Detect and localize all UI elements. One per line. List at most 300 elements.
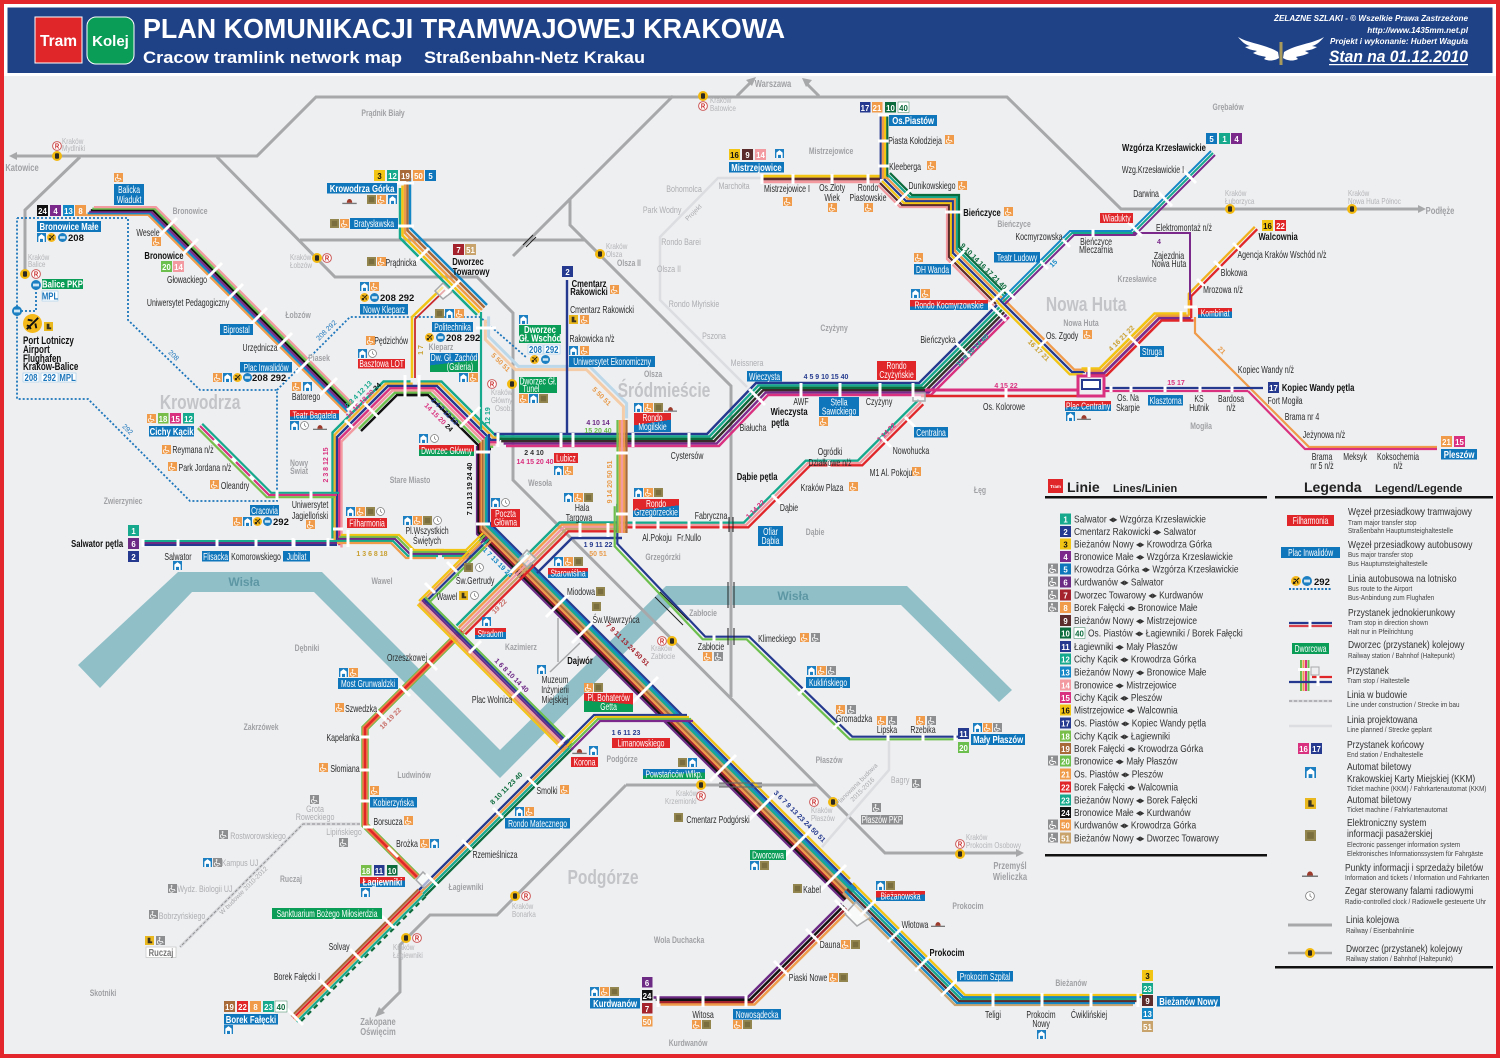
stop names: east: Wieczysta: [771, 406, 808, 417]
list of tram lines: 13: [1061, 668, 1070, 678]
transfer tags: blue: Bratysławska: [354, 218, 394, 229]
stop names: south-east: Klimeckiego: [758, 633, 796, 644]
tram bundle: Limanowskiego: [565, 715, 693, 750]
district names: Skotniki: [90, 988, 116, 998]
line badges: termini: 6: [131, 540, 136, 549]
district names: Stare Miasto: [390, 475, 430, 485]
legend: tram stop: Przystanek: [1347, 665, 1389, 676]
legend: passenger information system: Electronic passenger information system: [1347, 842, 1461, 849]
transfer tags: grey and bus boxes: 208: [25, 372, 37, 383]
line number captions along tracks: 15 20 40: [584, 428, 612, 435]
district names: Łagiewniki: [449, 882, 483, 892]
legend: airport bus: [1289, 573, 1457, 602]
list of tram lines: 3: [1063, 540, 1068, 550]
line badges: termini: 12: [184, 415, 193, 424]
list of tram lines: Bronowice Małe ◂▸ Wzgórza Krzesławickie: [1074, 551, 1233, 562]
legend: line planned: Linia projektowana: [1347, 714, 1418, 725]
stop names: centre: Miejskiej: [542, 694, 568, 705]
list of tram lines: Mistrzejowice ◂▸ Walcownia: [1074, 705, 1178, 716]
stop names: centre: Cmentarz Podgórski: [686, 814, 750, 825]
line number captions along tracks: 1 7 13 19 24: [481, 547, 513, 579]
stop names: east: Piasta Kołodzieja: [888, 135, 942, 146]
legend: radio clock: Radio-controlled clock / Radiowelle gesteuerte Uhr: [1345, 899, 1487, 906]
railway station and direction labels: Zakopane: [360, 1016, 396, 1027]
icon: Kolej button: Kolej: [92, 33, 129, 50]
transfer tags: grey and bus boxes: Płaszów PKP: [862, 814, 903, 825]
credits: http://www.1435mm.net.pl: [1367, 26, 1469, 35]
transfer tags: grey and bus boxes: 292: [546, 344, 558, 355]
line under construction to Ruczaj: [180, 824, 360, 947]
stop names: east: AWF: [793, 396, 809, 407]
stop names: south-east: Kabel: [803, 884, 821, 895]
district names: Piasek: [308, 353, 330, 363]
legend: line under construction: [1289, 689, 1460, 709]
district names: Łęg: [974, 485, 986, 495]
district names: Grębałów: [1213, 102, 1244, 112]
legend: railway station stop: [1292, 639, 1465, 660]
tram bundle: Dąbie: [620, 400, 923, 527]
transfer tags: red and mixed: Teatr Bagatela: [293, 409, 337, 421]
transfer tags: blue: Pleszów: [1444, 449, 1475, 460]
railway station and direction labels: Kraków: [393, 942, 415, 952]
list of tram lines: Bieżanów Nowy ◂▸ Krowodrza Górka: [1074, 539, 1213, 550]
line badges: termini: 9: [1145, 997, 1150, 1006]
legend: KKM ticket machine: [1305, 761, 1486, 793]
list of tram lines: Bieżanów Nowy ◂▸ Mistrzejowice: [1074, 615, 1197, 626]
district names: Zwierzyniec: [104, 496, 143, 506]
stop names: west: Pl.Wszystkich: [405, 525, 449, 536]
railway station and direction labels: Balice: [28, 259, 45, 269]
line badges: termini: 50: [643, 1018, 652, 1027]
stop names: east: Elektromontaż n/ż: [1156, 222, 1212, 233]
district names: Czyżyny: [820, 323, 848, 333]
legend: bus major transfer stop: Węzeł przesiadkowy autobusowy: [1348, 539, 1473, 550]
legend: line under construction: Line under construction / Strecke im bau: [1347, 702, 1460, 709]
stop names: centre: Miodowa: [567, 586, 595, 597]
railway station and direction labels: Kraków: [512, 901, 534, 911]
line badges: termini: 3: [377, 172, 382, 181]
list of tram lines: 15: [1061, 694, 1070, 703]
stop names: south-east: Lipska: [877, 724, 897, 735]
airport block: Port Lotniczy: [23, 335, 74, 347]
stop names: east: Bardosa: [1218, 393, 1244, 404]
stop names: south-east: Teligi: [985, 1009, 1001, 1020]
transfer tags: railway station green: Dworzec: [524, 324, 556, 335]
legend: radio clock: [1306, 885, 1487, 906]
stop names: south-east: Gromadzka: [836, 713, 872, 724]
legend: railway station: [1288, 943, 1463, 963]
stop names: centre: Cmentarz: [572, 278, 607, 289]
stop names: east: Kopiec Wandy pętla: [1282, 382, 1355, 393]
stop names: centre: Fr.Nullo: [677, 532, 701, 543]
list of tram lines: 51: [1061, 834, 1070, 844]
stop names: east: pętla: [771, 417, 790, 428]
legend: railway station stop: Dworzec (przystanek) kolejowy: [1348, 639, 1465, 650]
list of tram lines: Cichy Kącik ◂▸ Pleszów: [1074, 692, 1162, 703]
railway station and direction labels: Kraków: [811, 805, 833, 815]
tram bundle: ring north-east: [406, 382, 504, 449]
district names: Nowa Huta: [1063, 318, 1099, 328]
district names: Bieńczyce: [997, 219, 1031, 229]
planned and construction stop names: 2015-2016: [849, 776, 877, 803]
tram bundle: Krowodrza Górka: [400, 178, 487, 315]
stop names: east: Meksyk: [1343, 451, 1368, 462]
line number captions along tracks: 21: [1216, 346, 1226, 356]
stop names: east: Dąbie: [780, 502, 798, 513]
stop names: south-east: Witosa: [692, 1009, 714, 1020]
stop names: east: Walcownia: [1258, 231, 1299, 242]
planned and construction stop names: Pszona: [702, 330, 726, 341]
stop names: east: nr 5 n/ż: [1310, 460, 1334, 471]
railway station and direction labels: Osob.: [495, 403, 512, 413]
district names: Świat: [290, 466, 308, 476]
list of tram lines: 18: [1061, 732, 1070, 742]
panel: legend: [1275, 479, 1493, 968]
legend: line planned: Line planned / Strecke geplant: [1347, 727, 1432, 734]
line number captions along tracks: 8 10 11 23 40: [489, 771, 524, 806]
district names: Kleparz: [429, 342, 453, 352]
line badges: termini: 17: [1269, 384, 1278, 393]
line badges: termini: 19: [225, 1003, 234, 1012]
legend: end station: 16: [1299, 745, 1308, 754]
planned and construction stop names: Bobrzyńskiego: [159, 910, 206, 921]
stop names: east: n/ż: [1226, 402, 1236, 413]
transfer tags: blue: Kuklińskiego: [809, 677, 847, 688]
list of tram lines: Bieżanów Nowy ◂▸ Bronowice Małe: [1074, 667, 1206, 678]
district names: Podgórze: [607, 754, 638, 764]
stop names: centre: Dworzec: [452, 256, 484, 267]
planned and construction stop names: Lipińskiego: [326, 826, 362, 837]
line badges: termini: 3: [1145, 972, 1150, 981]
line badges: termini: 14: [174, 263, 183, 272]
tram bundle: Grzegórzki to Stradom: [456, 522, 625, 634]
district names: Mistrzejowice: [809, 146, 854, 156]
list of tram lines: Cichy Kącik ◂▸ Łagiewniki: [1074, 731, 1170, 742]
airport bus route dotted: [17, 218, 527, 501]
legend: airport bus: Bus-Anbindung zum Flughafen: [1348, 595, 1435, 602]
tram bundle: Bronowice: [86, 207, 354, 413]
line badges: termini: 5: [1209, 135, 1214, 144]
stop names: west: Świętych: [413, 534, 441, 546]
legend: information and ticket points: Information and tickets / Information und Fahrkarten: [1345, 875, 1490, 882]
stop names: west: Jagielloński: [292, 510, 328, 521]
tram bundle: Wzgórza Krzesławickie: [1001, 151, 1215, 304]
stop names: centre: Al.Pokoju: [642, 532, 672, 543]
stop names: west: Orzeszkowej: [387, 652, 427, 663]
district names: Mogiła: [1190, 421, 1212, 431]
stop names: east: [737, 135, 1419, 513]
line badges: termini: 18: [159, 415, 168, 424]
district names: Zakrzówek: [244, 722, 279, 732]
legend: radio clock: Zegar sterowany falami radiowymi: [1345, 885, 1473, 896]
line badges: termini: 6: [645, 979, 650, 988]
airport block: Kraków-Balice: [23, 361, 79, 373]
legend: end station: [1298, 739, 1424, 759]
line number captions along tracks: 5 50 51: [489, 352, 511, 374]
stop names: east: Czyżyny: [866, 396, 893, 407]
stop names: east: Kleeberga: [889, 161, 921, 172]
list of tram lines: Kurdwanów ◂▸ Krowodrza Górka: [1074, 820, 1197, 831]
line number captions along tracks: 208: [166, 349, 180, 363]
stop names: centre: Rakowicki: [570, 286, 608, 297]
legend: one way stop: Tram stop in direction shown: [1348, 620, 1428, 627]
stop names: south-east: Nowy: [1032, 1018, 1050, 1029]
legend: information and ticket points: [1302, 862, 1490, 882]
transfer tags: blue: Nowosądecka: [736, 1009, 779, 1020]
transfer tags: railway station green: Tunel: [523, 383, 539, 394]
district names: Wola Duchacka: [654, 935, 705, 945]
Plac Centralny loop: [1078, 376, 1104, 396]
stop names: west: Salwator: [164, 551, 192, 562]
legend: tram stop: Tram stop / Haltestelle: [1347, 678, 1410, 685]
line badges: termini: 21: [873, 104, 882, 113]
stop names: west: Batorego: [292, 391, 320, 402]
stop names: east: Dunikowskiego: [909, 180, 956, 191]
legend: ticket machine: [1305, 794, 1447, 814]
line badges: termini: 21: [1442, 438, 1451, 447]
tram bundle: Salwator: [143, 541, 337, 545]
stop names: east: Mistrzejowice I: [764, 183, 810, 194]
list of tram lines: 2: [1063, 528, 1068, 537]
tram bundle: Bieżanów branch: [843, 883, 1143, 1005]
airport block: Flughafen: [23, 353, 61, 365]
railway station and direction labels: Warszawa: [755, 78, 791, 89]
stop names: centre: [452, 256, 750, 860]
transfer tags: red and mixed: Korona: [574, 756, 596, 768]
district names: Zabłocie: [689, 608, 717, 618]
line badges: termini: 11: [375, 867, 384, 876]
line badges: termini: 13: [1143, 1010, 1152, 1019]
list of tram lines: Bronowice ◂▸ Mistrzejowice: [1074, 680, 1177, 691]
transfer tags: blue: Wieczysta: [749, 371, 780, 382]
line badges: termini: 10: [886, 104, 895, 113]
heading: Linie: Lines/Linien: [1113, 483, 1177, 495]
transfer tags: blue: Bieżanów Nowy: [1159, 996, 1219, 1007]
list of tram lines: 24: [1061, 809, 1070, 818]
transfer tags: blue: Rondo Matecznego: [508, 818, 567, 829]
list of tram lines: 7: [1063, 591, 1068, 601]
district names: Płaszów: [816, 755, 843, 765]
stop names: east: Koksochemia: [1377, 451, 1419, 462]
line badges: termini: 1: [131, 527, 136, 536]
bus line numbers at stops: 208 292: [446, 333, 480, 344]
railway station and direction labels: Krzemionki: [665, 796, 697, 806]
stop names: east: Bieńczyce: [1080, 236, 1112, 247]
stop names: east: Zajezdnia: [1154, 250, 1184, 261]
panel: lines list: [1045, 479, 1267, 856]
list of tram lines: Łagiewniki ◂▸ Mały Płaszów: [1074, 641, 1178, 652]
railway station and direction labels: Kraków: [491, 387, 513, 397]
stop names: west: Szwedzka: [345, 703, 377, 714]
legend: KKM ticket machine: Automat biletowy: [1347, 761, 1412, 772]
stop names: south-east: Rzebika: [910, 724, 936, 735]
stop names: east: Os. Kolorowe: [983, 401, 1025, 412]
list of tram lines: Dworzec Towarowy ◂▸ Kurdwanów: [1074, 590, 1203, 601]
line badges: termini: 23: [264, 1003, 273, 1012]
line badges: termini: 4: [1234, 135, 1239, 144]
line badges: termini: 13: [64, 207, 73, 216]
list of tram lines: Kurdwanów ◂▸ Salwator: [1074, 577, 1164, 588]
list of tram lines: Cichy Kącik ◂▸ Krowodrza Górka: [1074, 654, 1197, 665]
district names: Wesoła: [528, 478, 552, 488]
planned and construction stop names: Park Wodny: [643, 204, 682, 215]
line number captions along tracks: [120, 239, 1226, 844]
stop names: west: Urzędnicza: [243, 342, 278, 353]
transfer tags: red and mixed: Bieżanowska: [881, 890, 921, 902]
line badges: termini: 7: [456, 246, 461, 255]
list of tram lines: 21: [1061, 770, 1070, 780]
railway station and direction labels: Zabłocie: [651, 651, 675, 661]
heading: Linie: Tram: [1050, 484, 1061, 489]
stop names: east: Kopiec Wandy n/ż: [1238, 364, 1294, 375]
line number captions along tracks: 2 3 8 12 15: [323, 447, 330, 483]
list of tram lines: Cmentarz Rakowicki ◂▸ Salwator: [1074, 526, 1196, 537]
big area name: Śródmieście: Śródmieście: [618, 378, 710, 401]
tram bundle: Bieńczyce: [878, 173, 1006, 306]
viaduct and bridge marks: [523, 235, 762, 787]
line number captions along tracks: 19 22: [491, 598, 509, 616]
stop names: west: Słomiana: [330, 763, 360, 774]
legend: passenger information system: Elektronisches Informationssystem für Fahrgäste: [1347, 851, 1483, 858]
transfer tags: red and mixed: Lubicz: [556, 452, 576, 464]
stop names: centre: Fabryczna: [695, 510, 728, 521]
line number captions along tracks: 9 14 20 50 51: [607, 460, 614, 503]
line number captions along tracks: 18 19 22: [379, 707, 403, 731]
transfer tags: railway station green: Powstańców Wlkp.: [645, 768, 703, 780]
stop names: east: KS: [1194, 393, 1204, 404]
legend: tram major transfer stop: Węzeł przesiadkowy tramwajowy: [1348, 506, 1472, 517]
stop names: south-east: Dauna: [820, 939, 841, 950]
line number captions along tracks: 5 50 51: [590, 386, 612, 408]
stop names: south-east: Piaski Nowe: [789, 972, 827, 983]
district names: Dębniki: [295, 643, 319, 653]
line number captions along tracks: 1 9 11 22: [584, 542, 613, 549]
legend: end station: Przystanek końcowy: [1347, 739, 1424, 750]
planned and construction stop names: Grota: [306, 803, 324, 814]
transfer tags: grey and bus boxes: [23, 290, 903, 958]
transfer tags: red and mixed: Limanowskiego: [618, 737, 665, 749]
transfer tags: blue: Prokocim Szpital: [960, 971, 1010, 982]
credits: ŻELAZNE SZLAKI - © Wszelkie Prawa Zastrzeżone: [1273, 13, 1468, 23]
stop names: east: Piastowskie: [850, 192, 887, 203]
stop names: east: Skarpie: [1116, 402, 1140, 413]
railway station and direction labels: Łagiewniki: [393, 950, 423, 960]
stop names: centre: Św.Wawrzyńca: [592, 613, 640, 625]
stop names: centre: Rzemieślnicza: [472, 849, 518, 860]
stop names: south-east: Ćwiklińskiej: [1071, 1009, 1107, 1020]
stop names: east: Agencja Kraków Wschód n/ż: [1237, 249, 1327, 260]
stop names: west: Św.Gertrudy: [456, 574, 495, 586]
line badges: termini: 12: [388, 172, 397, 181]
legend: railway line: [1288, 914, 1414, 935]
line number captions along tracks: 1 14 22: [745, 499, 767, 521]
railway station and direction labels: Kraków: [28, 252, 50, 262]
line badges: termini: 15: [1455, 438, 1464, 447]
transfer tags: railway station green: Gł. Wschód: [519, 332, 562, 344]
transfer tags: railway station green: Balice PKP: [42, 278, 83, 290]
line badges: termini: 17: [861, 104, 870, 113]
list of tram lines: 12: [1061, 655, 1070, 665]
stop names: south-east: Włotowa: [902, 919, 929, 930]
legend: ticket machine: Ticket machine / Fahrkartenautomat: [1347, 807, 1447, 814]
stop names: west: Solvay: [329, 941, 350, 952]
stop names: east: Bieńczycka: [920, 334, 956, 345]
list of tram lines: 5: [1063, 565, 1068, 575]
transfer tags: grey and bus boxes: Ruczaj: [149, 947, 173, 958]
heading: Legenda: Legend/Legende: [1375, 483, 1462, 495]
transfer tags: railway station green: (Galeria): [447, 361, 473, 372]
transfer tags: blue: Most Grunwaldzki: [341, 678, 395, 689]
list of tram lines: 19: [1061, 745, 1070, 754]
transfer tags: red and mixed: Basztowa LOT: [359, 358, 405, 369]
stop names: west: Uniwersytet: [292, 499, 329, 510]
tram bundle: Walcownia: [1189, 227, 1257, 318]
transfer tags: red and mixed: Starowiślna: [550, 567, 586, 579]
legend: ticket machine: Automat biletowy: [1347, 794, 1412, 805]
legend: KKM ticket machine: Krakowskiej Karty Miejskiej (KKM): [1347, 773, 1475, 784]
district names: [90, 102, 1244, 1048]
line badges: termini: 9: [745, 151, 750, 160]
stop names: east: Darwina: [1133, 188, 1159, 199]
legend: bus major transfer stop: [1281, 539, 1473, 568]
line badges: termini: 18: [362, 867, 371, 876]
line badges: termini: 2: [131, 553, 136, 562]
district names: Łobzów: [285, 310, 311, 320]
line badges: termini: 50: [414, 172, 423, 181]
transfer tags: red and mixed: Kombinat: [1201, 307, 1230, 319]
list of tram lines: [1048, 514, 1243, 844]
legend: railway station: Railway station / Bahnhof (Haltepunkt): [1346, 956, 1453, 963]
stop names: centre: Towarowy: [453, 266, 490, 277]
stop names: west: Bronowice: [144, 250, 184, 261]
railway station and direction labels: Kraków: [966, 832, 988, 842]
stop names: west: Głowackiego: [167, 274, 207, 285]
district names: Prokocim: [952, 901, 984, 911]
transfer tags: red and mixed: Dworzec Główny: [421, 445, 473, 456]
planned and construction stop names: Olsza II: [657, 263, 681, 274]
railway station and direction labels: Batowice: [710, 103, 736, 113]
district names: Bronowice: [173, 206, 208, 216]
railway station and direction labels: Kraków: [606, 241, 628, 251]
tram lines to Kopiec Wandy: [1104, 388, 1263, 391]
stop names: centre: Dajwór: [567, 655, 593, 666]
railway station and direction labels: Podłęże: [1426, 205, 1454, 216]
transfer tags: blue: Sawickiego: [822, 405, 856, 417]
line number captions along tracks: 4 5 9 10 15 40: [804, 374, 848, 381]
transfer tags: blue: Krowodrza Górka: [330, 183, 395, 194]
stop names: east: Jeżynowa n/ż: [1303, 429, 1345, 440]
line number captions along tracks: 50 51: [589, 551, 607, 558]
legend: bus major transfer stop: Bus Hauptumsteighaltestelle: [1348, 561, 1428, 568]
transfer tags: blue: Klasztorna: [1149, 395, 1182, 406]
line badges: termini: 16: [730, 151, 739, 160]
tram bundle: Kopiec / Plac Centralny west: [921, 390, 1104, 396]
line number captions along tracks: 9 10 14 16 17 21 40: [959, 242, 1008, 292]
stop names: centre: Smolki: [537, 785, 558, 796]
stop names: centre: Rakowicka n/ż: [569, 333, 615, 344]
transfer tags: blue: Kurdwanów: [593, 998, 638, 1009]
legend: railway station stop: Dworcowa: [1295, 643, 1327, 654]
transfer tags: blue: Centralna: [916, 427, 946, 438]
tram bundle: Wawel north: [419, 541, 485, 607]
stop names: centre: Cmentarz Rakowicki: [570, 304, 634, 315]
line badges: termini: 20: [959, 744, 968, 753]
stop names: east: Bieńczyce: [963, 207, 1001, 218]
legend: tram major transfer stop: Filharmonia: [1293, 515, 1328, 526]
railway station and direction labels: Kraków: [290, 252, 312, 262]
line number captions along tracks: 15: [1049, 259, 1059, 269]
legend: tram major transfer stop: Straßenbahn Hauptumsteighaltestelle: [1348, 528, 1453, 535]
